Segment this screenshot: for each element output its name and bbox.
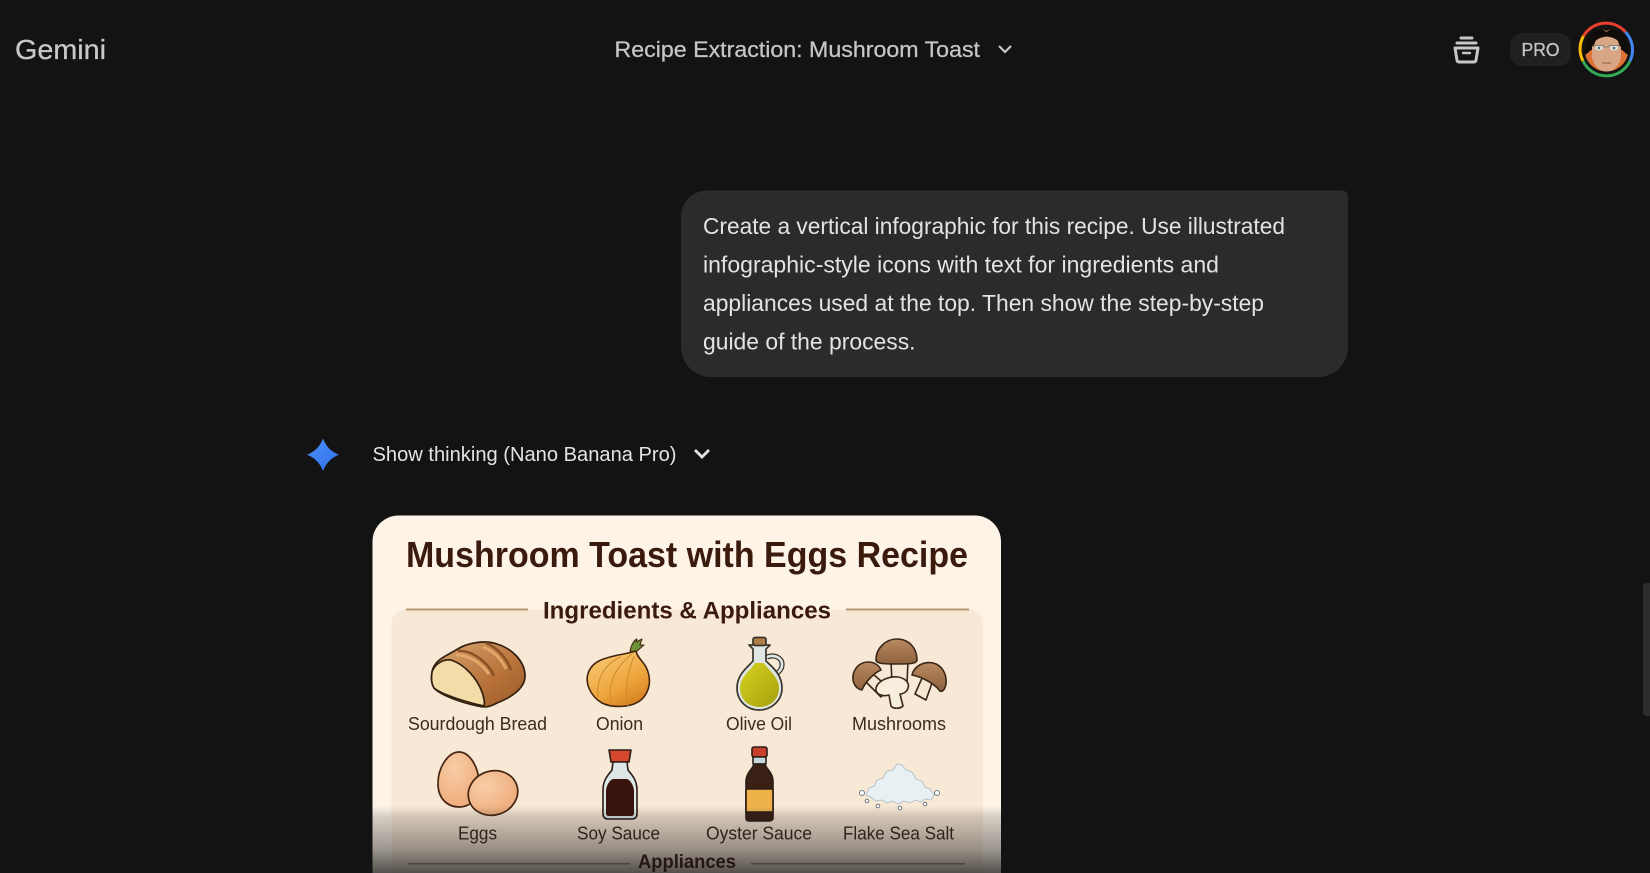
- ingredient: onion: Onion: [596, 714, 643, 734]
- ingredient: flake sea salt: [843, 764, 954, 844]
- icon: chevron: [695, 450, 709, 457]
- recipe infographic card: [372, 516, 1001, 873]
- section heading: ingredients: Ingredients & Appliances: [543, 598, 831, 624]
- ingredient: oyster sauce: [706, 747, 812, 844]
- ingredient: eggs: Eggs: [458, 824, 497, 844]
- icon: oil bottle: [737, 638, 782, 710]
- PRO badge: PRO: [1522, 40, 1560, 60]
- icon: Gemini spark: [307, 438, 339, 471]
- prompt text: Create a vertical infographic for this recipe. Use illustrated: [703, 213, 1285, 239]
- ingredient: sourdough bread: Sourdough Bread: [408, 714, 547, 734]
- section heading: appliances: Appliances: [638, 852, 736, 873]
- prompt text: appliances used at the top. Then show the step-by-step: [703, 290, 1264, 316]
- icon: archive box: [1455, 38, 1478, 62]
- prompt text: [703, 213, 1285, 354]
- ingredient: olive oil: [726, 638, 792, 734]
- icon: onion: [587, 639, 649, 706]
- ingredient: soy sauce: [577, 750, 660, 844]
- ingredient: sourdough bread: [408, 642, 547, 734]
- prompt text: infographic-style icons with text for ingredients and: [703, 252, 1219, 278]
- icon: oyster sauce bottle: [746, 747, 773, 821]
- user prompt bubble: [681, 190, 1348, 377]
- icon: salt pile: [860, 764, 940, 810]
- PRO badge: [1510, 33, 1571, 66]
- ingredient: soy sauce: Soy Sauce: [577, 824, 660, 844]
- icon: soy sauce bottle: [603, 750, 637, 819]
- icon: mushrooms: [853, 639, 946, 708]
- ingredient: eggs: [438, 752, 524, 844]
- ingredient: onion: [587, 639, 649, 734]
- avatar: [1579, 22, 1634, 77]
- icon: bread: [431, 642, 525, 707]
- ingredients panel: [392, 610, 983, 873]
- conversation title: Recipe Extraction: Mushroom Toast: [614, 37, 980, 62]
- scrollbar thumb: [1643, 583, 1650, 716]
- ingredient: oyster sauce: Oyster Sauce: [706, 824, 812, 844]
- icon: eggs: [438, 752, 524, 822]
- ingredient: flake sea salt: Flake Sea Salt: [843, 824, 954, 844]
- Gemini logo: Gemini: [15, 34, 106, 65]
- show thinking row: Show thinking (Nano Banana Pro): [372, 444, 676, 466]
- ingredient: olive oil: Olive Oil: [726, 714, 792, 734]
- icon: title chevron: [999, 46, 1011, 52]
- bottom fade overlay: [372, 806, 1001, 873]
- prompt text: guide of the process.: [703, 328, 916, 354]
- ingredient: mushrooms: Mushrooms: [852, 714, 946, 734]
- top bar: [15, 22, 1634, 77]
- ingredient: mushrooms: [852, 639, 946, 734]
- infographic title: Mushroom Toast with Eggs Recipe: [406, 534, 968, 575]
